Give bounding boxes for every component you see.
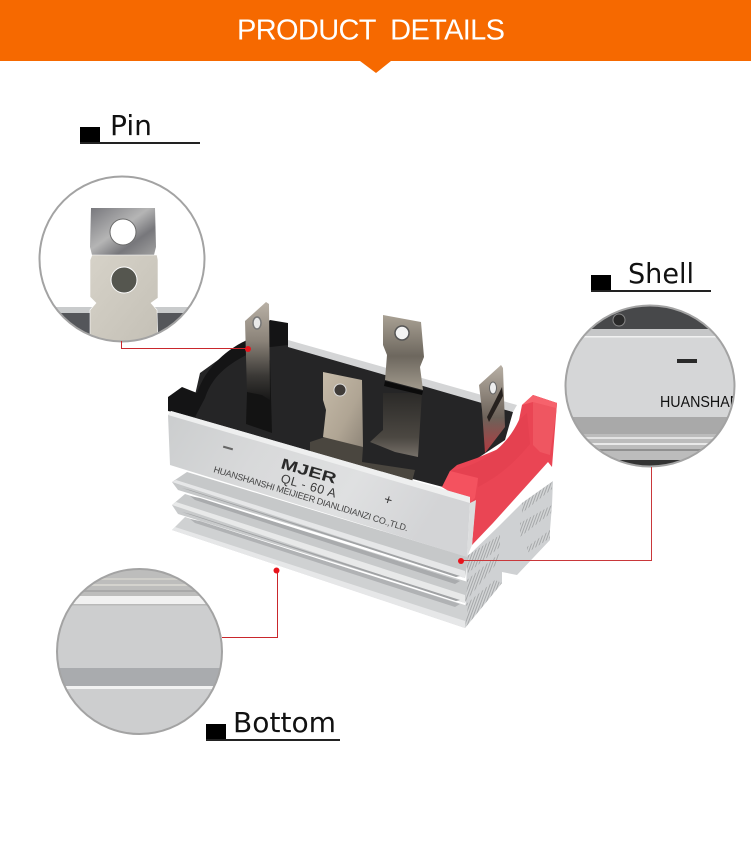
heatsink end profile xyxy=(465,481,553,628)
terminal: back pin xyxy=(370,315,424,457)
heading: Shell xyxy=(591,257,711,292)
heading: Pin xyxy=(80,109,200,144)
engraved text on face: MJER xyxy=(279,456,339,488)
callout circle: Bottom detail xyxy=(55,565,225,737)
heatsink fins xyxy=(172,472,468,628)
terminal: front pin xyxy=(310,372,415,482)
aluminium front face xyxy=(168,411,470,557)
red end cap xyxy=(442,395,557,545)
engraved text on face: QL - 60 A xyxy=(279,471,338,501)
heading: Pin: Pin xyxy=(110,109,152,142)
header banner xyxy=(0,0,751,73)
callout circle: Shell detail: HUANSHAN xyxy=(660,394,740,411)
leader line: Pin xyxy=(122,341,251,352)
leader line: Bottom xyxy=(222,568,280,638)
terminal: left pin xyxy=(245,302,272,433)
heading: Shell: Shell xyxy=(628,257,694,290)
leader line: Shell xyxy=(458,467,652,564)
engraved text on face: + xyxy=(382,491,395,508)
callout circle: Pin detail xyxy=(39,176,205,343)
product photo: bridge rectifier xyxy=(168,302,557,628)
resin top xyxy=(170,342,513,487)
heading: Bottom: Bottom xyxy=(233,706,336,739)
terminal: right pin xyxy=(479,365,505,453)
heatsink end hatching xyxy=(465,482,552,628)
callout circle: Shell detail xyxy=(560,300,740,470)
engraved text on face: HUANSHANSHI MEIJIEER DIANLIDIANZI CO.,TLD. xyxy=(212,464,409,533)
front terminal xyxy=(90,255,158,342)
black corner cap xyxy=(168,320,288,417)
back silver edge xyxy=(288,340,517,412)
rear terminal xyxy=(90,208,156,255)
title: PRODUCT DETAILS xyxy=(237,14,505,46)
